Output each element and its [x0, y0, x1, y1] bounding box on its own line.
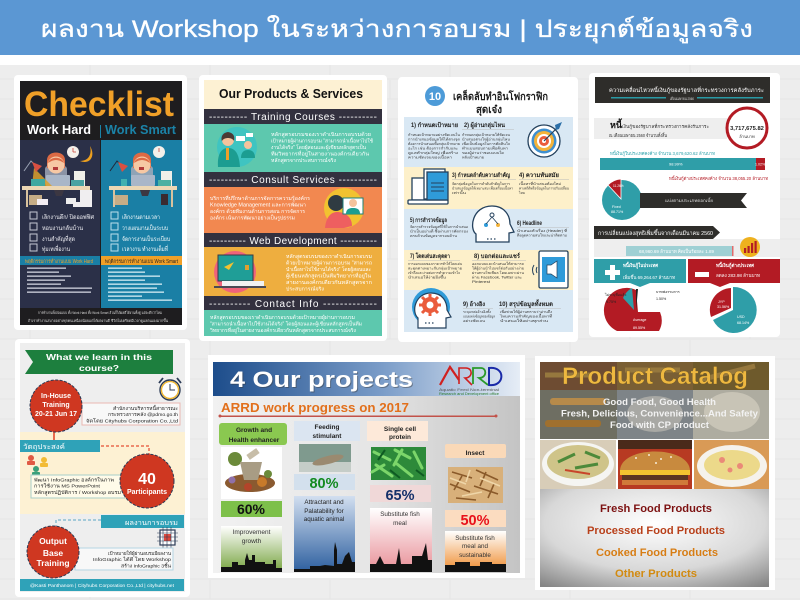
tip 4: 4) ความทันสมัย [519, 171, 559, 179]
image: herbs and mortar [221, 447, 282, 499]
section: web development [204, 233, 382, 296]
tip 7: นำเสนอให้ง่ายยิ่งขึ้น [408, 274, 447, 280]
tip 1: การนำเสนอข้อมูลให้ได้ตรงจุด [408, 136, 461, 142]
card: attractant [294, 496, 355, 572]
callout: objectives text: การใช้งาน MS PowerPoint [34, 482, 101, 490]
chart: domestic vs foreign bar: 98.99% [669, 162, 683, 166]
project column: feeding stimulant [294, 421, 360, 572]
footer note: ถ้าเราทำงานสบายอย่างทุกคนเหนื่อยน้อยแต่ได้ผลงานดี ชีวิตไม่เครียดมีเวลาดูแลตนเองมากขึ้น [28, 317, 168, 324]
icon: consultants [217, 127, 257, 167]
tip 9 [463, 300, 495, 323]
checklist: work hard items: งานสำคัญที่สุด [42, 235, 75, 243]
callout: total debt amount: 3,717,675.82 [730, 126, 764, 132]
tip 6: ดึงดูดความสนใจและน่าติดตาม [517, 232, 568, 238]
callout: objectives text: หลักสูตรปฏิบัติการ / Workshop อบรม [34, 490, 121, 496]
tip 6: นำเสนอหัวเรื่อง (Header) ที่ [517, 228, 568, 233]
tip 8: 8) บอกต่อและแชร์ [474, 252, 521, 260]
icon: moon and clock [67, 146, 92, 162]
card: attractant: Attractant and [304, 499, 344, 506]
label: objectives [20, 440, 100, 452]
list: work hard notes [27, 268, 92, 293]
chart: domestic instrument pie: บาทฟอรรมการ [656, 290, 680, 294]
checklist: work smart items: เวลางาน ทำงานเต็มที่ [122, 244, 168, 253]
image: shrimp [299, 444, 351, 472]
chart: domestic instrument pie: 9.75% [606, 300, 617, 304]
callout: 40 Participants: 40 [138, 471, 156, 488]
icon: number 10 badge: 10 [429, 91, 441, 103]
card: attractant: aquatic animal [304, 516, 344, 523]
tip 9: ระบุแหล่งอ้างอิงทั้ง [463, 309, 491, 315]
image: mealworms [448, 467, 503, 503]
chart: domestic instrument pie: 89.55% [633, 326, 646, 330]
icon: clock [153, 146, 165, 158]
panel: foreign debt decrease [688, 259, 780, 287]
callout: training organiser: สำนักงานบริหารหนี้สาธารณะ [113, 404, 178, 412]
chart: domestic instrument pie [604, 288, 680, 331]
text: catalog tagline: Food with CP product [610, 420, 710, 431]
stat: 80%: 80% [309, 476, 339, 492]
icon: head with network [473, 206, 514, 242]
title banner [0, 0, 800, 55]
tip 2: ของผู้อ่านว่าชอบแบบใด [462, 150, 505, 155]
tip 4: ทางสถิติหรือข้อมูลในการปรับเปลี่ยน [519, 186, 569, 190]
tip 10: เพื่อช่วยให้ผู้อ่านทราบว่าอ่านถึง [500, 309, 552, 314]
card: substitute fish meal: Substitute fish [380, 511, 420, 518]
heading: Checklist: Checklist [24, 85, 174, 124]
chart: foreign currency pie: JYP [718, 300, 725, 304]
list: product categories: Processed Food Products [587, 525, 725, 537]
tip 6: 6) Headline [517, 221, 543, 227]
icon: head with gear [412, 288, 451, 328]
project column: insect [445, 444, 506, 572]
tip 2: หลังเป้าหมาย [462, 154, 484, 160]
list: product categories: Fresh Food Products [600, 503, 712, 515]
panel: foreign debt decrease: หนี้เงินกู้ต่างประเทศ [716, 260, 755, 270]
callout: Output Base Training: Training [36, 558, 70, 568]
panel: domestic debt increase [594, 259, 686, 287]
icon: chart badge [740, 237, 760, 257]
footer note: การทำงานทั้งสองแบบ ทั้ง Work Hard ทั้ง Work Smart ล้วนก็ได้ผลดีได้งานทั้งคู่ แต่จะดีกว่าไหม [38, 309, 162, 315]
callout: output text: เป้าหมายให้ผู้ผ่านอบรมมีผลงาน [108, 550, 172, 557]
card: substitute and sustainable: sustainable [459, 552, 491, 559]
section: training courses: ---------- Training Courses ---------- [209, 112, 377, 123]
text: web description [286, 253, 372, 292]
project column: single cell protein: protein [389, 434, 411, 441]
heading: tips title: สุดเจ๋ง [476, 104, 502, 117]
chart: foreign currency pie: 31.56% [717, 305, 730, 309]
tip 1: อะไร เช่น ต้องการกำกับและ [408, 146, 458, 150]
panel: public debt infographic [589, 73, 780, 337]
heading: course ribbon [25, 350, 173, 374]
stat: 80% [294, 474, 355, 492]
text: training description: หลักสูตรอบรมของเราดำเนินการอบรมด้วย [271, 131, 371, 138]
panel: domestic debt increase: เพิ่มขึ้น 69,264.67 ล้านบาท [623, 274, 675, 280]
text: training description: หลักสูตรจากประสบการณ์จริง [271, 157, 337, 164]
tip 5: จัดการสำรวจข้อมูลที่ใช้ในการนำเสนอ [410, 224, 468, 229]
text: debt summary: ณ เดือนเมษายน 2560 จำนวนทั้งสิ้น [609, 132, 667, 138]
tip 2: 2) ผู้อ่านกลุ่มไหน [464, 121, 506, 130]
chart: foreign currency pie: USD [737, 315, 745, 319]
card: substitute and sustainable: meal and [462, 543, 488, 550]
tip 8: ให้ผู้อ่านนำไปแชร์ต่อกันอย่างง่าย [472, 266, 524, 270]
project column: feeding stimulant: Feeding [315, 424, 339, 431]
heading: Product Catalog: Product Catalog [562, 363, 748, 390]
text: training description: ทีมวิทยากรที่อยู่ในสายงานองค์กรเดียวกัน [271, 150, 370, 158]
tip 2: ทำแบบสอบถามเพื่อค้นหา [462, 146, 508, 150]
icon: people network [27, 455, 48, 475]
subheading: Work Hard: Work Hard [27, 122, 91, 137]
tip 10: 10) สรุปข้อมูลทั้งหมด [499, 298, 553, 309]
heading: monthly change arrow: การเปลี่ยนแปลงสุทธิเพิ่มขึ้นจากเดือนมีนาคม 2560 [598, 228, 713, 237]
text: web description: ประสบการณ์จริง [286, 286, 325, 292]
text: web description: ด้วยเป้าหมายผู้ผ่านการอบรม "สามารถ [286, 260, 372, 266]
callout: objectives text [31, 475, 125, 498]
text: web description: ผู้เขียนหลักสูตรเป็นทีมวิทยากรที่อยู่ใน [286, 272, 372, 280]
callout: Output Base Training: Base [43, 548, 63, 558]
tip 10: นำเสนอให้อย่างทุกส่วน [500, 318, 549, 324]
checklist: work hard items: เลิกงานดึก/ ปิดออฟฟิศ [42, 214, 94, 221]
list: product categories: Other Products [615, 568, 697, 580]
checklist: work hard items: ทุ่มเทเพื่องาน [42, 245, 71, 253]
heading: 4 Our projects: 4 Our projects [231, 368, 414, 393]
checklist: work smart items [111, 212, 170, 253]
subheading: ARRD work progress: ARRD work progress on 2017 [221, 400, 409, 415]
callout: In-House Training: Training [42, 402, 70, 409]
text: catalog tagline: Fresh, Delicious, Convenience...And Safety [561, 408, 759, 420]
callout: objectives text: พัฒนา InfoGraphic องค์กรในภาพ [34, 476, 114, 484]
tip 5: ครบถ้วนข้อมูลจากรอบด้าน [410, 233, 458, 238]
logo: ARRD: Aquatic Feed Non-terminal [439, 388, 499, 392]
image: burger [618, 440, 692, 489]
checklist: work smart items: วางแผนงานเป็นระบบ [122, 223, 168, 232]
chart: domestic instrument pie: 1.50% [656, 297, 667, 301]
label: work smart behaviour: พฤติกรรมการทำงานแบบ Work Smart [105, 258, 178, 265]
list: product categories: Cooked Food Products [596, 547, 718, 559]
heading: debt title bar: ความเคลื่อนไหวหนี้เงินกู้ของรัฐบาลที่กระทรวงการคลังรับภาระ [609, 86, 764, 94]
tip 1: ต้องการนำเสนอเพื่อกลุ่มเป้าหมาย [408, 141, 460, 147]
label: training output: ผลงานการอบรม [125, 520, 178, 527]
card: substitute fish meal [370, 508, 432, 572]
tip 8 [472, 252, 526, 284]
tip 3: นำเสนอข้อมูลให้เหมาะสม เพื่อเตรียมเนื้อหา [452, 186, 513, 190]
image: green bacteria [371, 447, 426, 480]
heading: 4 Our projects [213, 362, 520, 396]
tip 2: กำหนดกลุ่มเป้าหมายให้ชัดเจน [462, 132, 511, 138]
card: improvement growth [221, 526, 282, 572]
tip 9: แบบแหล่งข้อมูลของข้อมูล [463, 314, 495, 318]
callout: In-House Training: In-House [41, 393, 71, 400]
callout: training organiser: จัดโดย Cityhubs Corporation Co.,Ltd [86, 418, 178, 424]
callout: net change [594, 239, 780, 257]
text: consult description [210, 195, 310, 222]
tip 3: 3) กำหนดลำดับความสำคัญ [452, 171, 510, 179]
tip 6 [517, 221, 569, 238]
tip 9: 9) อ้างอิง [463, 300, 485, 308]
image: curry bowl [540, 440, 616, 489]
chart: domestic instrument pie: ไม่ระบุชื่อแล้ว [604, 292, 626, 298]
panel: domestic debt increase: หนี้เงินกู้ในประเทศ [623, 260, 659, 270]
column: work smart [101, 140, 182, 308]
chart: domestic vs foreign bar: หนี้เงินกู้ในประเทศคงค้าง จำนวน 3,679,620.62 ล้านบาท [610, 150, 715, 157]
heading: tips title [453, 89, 548, 117]
heading: 4 Our projects: 4 Our projects [230, 367, 413, 392]
section: training courses [204, 109, 382, 172]
tip 9: อย่างชัดเจน [463, 319, 486, 323]
checklist: work hard items: หอบงานกลับบ้าน [42, 224, 84, 232]
footer credit: @Kasti Panthanom | Cityhubs Corporation Co.,Ltd | cityhubs.net [30, 583, 175, 588]
project column: growth and health enhancer [219, 423, 287, 572]
section: consult services [204, 172, 382, 233]
icon: chip [157, 527, 178, 548]
panel: course summary [15, 339, 190, 597]
tip 4 [518, 171, 569, 195]
checklist: work smart items: จัดการงานเป็นระเบียบ [122, 234, 170, 243]
text: consult description: Knowledge Management และการพัฒนา [210, 202, 306, 208]
icon: laptop with trophy [214, 251, 266, 293]
card: improvement growth: growth [242, 538, 262, 545]
tip 7: สะดุดตาเหมาะกับกลุ่มเป้าหมาย [408, 266, 462, 272]
callout: In-House Training: 20-21 Jun 17 [35, 411, 77, 418]
icon: target with arrow [528, 122, 562, 157]
callout: output text: สร้าง InfoGraphic 3ชิ้น [121, 562, 172, 570]
panel: product catalog [535, 356, 775, 590]
callout: output text: InfoGraphic ได้ดี โดย Workshop [93, 556, 171, 563]
chart: foreign currency pie [710, 287, 757, 333]
text: contact description: วิทยากรที่อยู่ในสายงานองค์กรเดียวกันหลักสูตรจากประสบการณ์จริง [210, 327, 357, 334]
tip 1: 1) กำหนดเป้าหมาย [411, 121, 458, 129]
card: improvement growth: Improvement [233, 529, 271, 536]
chart: foreign currency pie: 68.14% [737, 321, 750, 325]
tip 2 [462, 121, 514, 160]
panel: products and services [199, 75, 387, 341]
heading: debt title bar: เดือนเมษายน 2560 [670, 96, 695, 101]
project column: single cell protein [367, 421, 432, 572]
tip 5: นำเป็นอย่างดี ซึ่งผ่านการคัดกรอง [410, 228, 468, 234]
text: debt summary: เงินกู้ของรัฐบาลที่กระทรวงการคลังรับภาระ [622, 123, 709, 130]
tip 8: ออกแบบและนำเสนอให้สามารถ [472, 261, 524, 266]
tip 1: ดูแลทำกลุ่มใหญ่ เพื่อสร้าง [408, 150, 458, 156]
label: objectives: วัตถุประสงค์ [23, 443, 65, 451]
callout: training organiser: กระทรวงการคลัง @pdmo.go.th [108, 412, 178, 418]
card: substitute and sustainable: Substitute fish [455, 535, 495, 542]
chart: fixed vs float pie: Fixed [612, 205, 621, 209]
card: substitute and sustainable [445, 531, 506, 572]
callout: Output Base Training [27, 526, 79, 578]
heading: course ribbon: course? [79, 363, 119, 373]
tip 8: Pinterest [472, 280, 490, 284]
callout: total debt amount: ล้านบาท [739, 134, 755, 139]
heading: monthly change arrow [594, 226, 720, 239]
heading: tips title: เคล็ดลับทำอินโฟกราฟิก [453, 89, 548, 103]
label: ribbon: แบ่งตามประเภทดอกเบี้ย [665, 197, 714, 203]
card: substitute fish meal: meal [393, 520, 407, 527]
project column: growth and health enhancer: Growth and [236, 427, 272, 434]
stat: 65%: 65% [385, 488, 415, 504]
chart: fixed vs float pie: 88.71% [611, 210, 624, 214]
text: web description: สายงานองค์กรเดียวกันหลักสูตรจาก [286, 279, 372, 286]
text: consult description: บริการที่ปรึกษาด้านการจัดการความรู้องค์กร [210, 195, 310, 202]
text: debt summary: หนี้ [610, 118, 623, 130]
image: dimmed food photos [540, 362, 769, 439]
chart: fixed vs float pie: 11.26% [613, 184, 624, 188]
stat: 50%: 50% [460, 513, 490, 529]
tip 3: เท่านั้น [452, 190, 467, 195]
icon: tidy desk with worker [109, 152, 177, 207]
subheading: Work Smart: Work Smart [105, 122, 177, 137]
tip 4: ไหม [518, 190, 526, 195]
section: contact info: ---------- Contact Info ------------- [209, 299, 377, 310]
tip 5 [410, 216, 468, 238]
callout: net change: 68,960.69 ล้านบาท คิดเป็นร้อยละ 1.89 [639, 247, 714, 255]
icon: alarm clock [159, 378, 181, 400]
heading: debt title bar [595, 77, 770, 103]
tip 7: เข้าถึงและง่ายต่อการทำความเข้าใจ [408, 270, 460, 275]
panel: our projects slide [208, 355, 525, 578]
tip 7: 7) โดดเด่นสะดุดตา [410, 252, 450, 260]
tip 1: กำหนดเป้าหมายอย่างชัดเจนใน [408, 132, 461, 137]
footer note [28, 309, 168, 324]
tip 3 [452, 171, 516, 195]
text: contact description: "สามารถนำเนื้อหาไปใช้งานได้จริง" โดยผู้สอนและผู้เขียนหลักสูตรเป็นทีม [210, 318, 362, 328]
tip 7: การออกแบบของเราควรทำให้โดดเด่น [408, 261, 462, 266]
image: rice bowl [694, 440, 769, 489]
tip 1 [408, 121, 461, 160]
tip 2: เพื่อเป็นข้อมูลในการตัดสินใจ [462, 140, 510, 146]
project column: insect: Insect [466, 450, 485, 457]
subheading: ARRD work progress [218, 400, 498, 418]
text: web description: หลักสูตรอบรมของเราดำเนินการอบรม [286, 253, 372, 260]
text: web description: นำเนื้อหาไปใช้งานได้จริง" โดยผู้สอนและ [286, 264, 371, 273]
panel: foreign debt decrease: ลดลง 283.98 ล้านบาท [716, 273, 760, 278]
panel: checklist poster [14, 75, 187, 330]
chart: fixed vs float pie [602, 179, 642, 220]
checklist: work hard items [30, 212, 94, 253]
chart: domestic instrument pie: Average [633, 318, 646, 322]
stat: 60%: 60% [237, 501, 266, 517]
checklist: work smart items: เลิกงานตามเวลา [122, 214, 160, 221]
chart: domestic vs foreign bar [600, 150, 768, 182]
icon: tablet with speaker [532, 251, 568, 288]
heading: Our Products & Services: Our Products & Services [219, 87, 363, 101]
tip 3: จัดกลุ่มข้อมูลในการลำดับสำคัญในการ [452, 181, 510, 187]
text: consult description: องค์กร เน้นการพัฒนาอย่างเป็นรูปธรรม [210, 214, 295, 222]
text: training description: เป้าหมายผู้ผ่านการอบรม "สามารถนำเนื้อหาไปใช้ [271, 136, 374, 144]
title banner: ผลงาน Workshop ในระหว่างการอบรม | ประยุกต์ข้อมูลจริง [41, 15, 753, 44]
text: catalog tagline [561, 397, 759, 431]
text: catalog tagline: Good Food, Good Health [603, 397, 716, 408]
section: contact info [204, 296, 382, 336]
panel: 10 infographic tips [398, 77, 578, 342]
text: training description [271, 131, 374, 164]
callout: total debt amount [727, 108, 767, 148]
column: work hard [20, 140, 100, 308]
project column: feeding stimulant: stimulant [313, 433, 342, 440]
logo: ARRD [439, 367, 501, 396]
callout: In-House Training [30, 380, 82, 440]
footer credit [20, 579, 184, 591]
tip 5: 5) การสำรวจข้อมูล [410, 216, 447, 225]
section: web development: ---------- Web Development ---------- [209, 236, 377, 247]
text: contact description [210, 314, 362, 334]
tip 2: นำเสนอตรงใจผู้อ่านกลุ่มไหน [462, 136, 511, 142]
list: work smart notes [108, 268, 172, 301]
card: attractant: Palatability for [304, 508, 344, 515]
section: consult services: ---------- Consult Services ---------- [209, 175, 377, 186]
tip 8: ผ่าน Facebook, Twitter และ [472, 276, 522, 280]
stat: 60% [221, 501, 282, 517]
logo: ARRD: Research and Development office [439, 392, 499, 396]
text: training description: งานได้จริง" โดยผู้สอนและผู้เขียนหลักสูตรเป็น [271, 143, 367, 151]
label: work hard behaviour: พฤติกรรมการทำงานแบบ Work Hard [25, 258, 93, 265]
icon: video consultation [324, 188, 364, 228]
text: contact description: หลักสูตรอบรมของเราดำเนินการอบรมด้วยเป้าหมายผู้ผ่านการอบรม [210, 314, 355, 321]
tip 4: เนื้อหาที่นำเสนอต้องใหม่ [519, 181, 562, 186]
callout: 40 Participants [120, 454, 174, 508]
list: product categories [587, 503, 725, 580]
icon: document and laptop [408, 169, 448, 204]
tip 8: ผ่านทางโซเชียล โดยเฉพาะผ่าน [472, 270, 525, 275]
text: consult description: องค์กร ด้วยทีมงานด้านการสอน การจัดการ [210, 208, 305, 215]
project column: single cell protein: Single cell [384, 426, 416, 433]
callout: Output Base Training: Output [39, 536, 67, 546]
icon: number 10 badge [425, 86, 445, 106]
label: ribbon [640, 193, 747, 208]
callout: training organiser [82, 403, 180, 425]
callout: 40 Participants: Participants [127, 489, 167, 496]
tip 10: ไหนความสำคัญของเนื้อหาที่ [499, 314, 553, 318]
tip 1: ความชัดเจนของเนื้อหา [408, 154, 452, 160]
tip 10 [499, 298, 561, 324]
chart: domestic vs foreign bar: 1.02% [755, 162, 766, 166]
label: training output [101, 515, 184, 528]
tip 7 [408, 252, 462, 280]
stat: 65% [370, 485, 431, 504]
heading: course ribbon: What we learn in this [46, 352, 152, 362]
icon: desk with worker [22, 152, 92, 207]
callout: output text [75, 548, 173, 570]
project column: growth and health enhancer: Health enhancer [229, 437, 280, 444]
text: debt summary [594, 118, 727, 139]
chart: domestic vs foreign bar: หนี้เงินกู้ต่างประเทศคงค้าง จำนวน 38,055.20 ล้านบาท [669, 175, 768, 182]
